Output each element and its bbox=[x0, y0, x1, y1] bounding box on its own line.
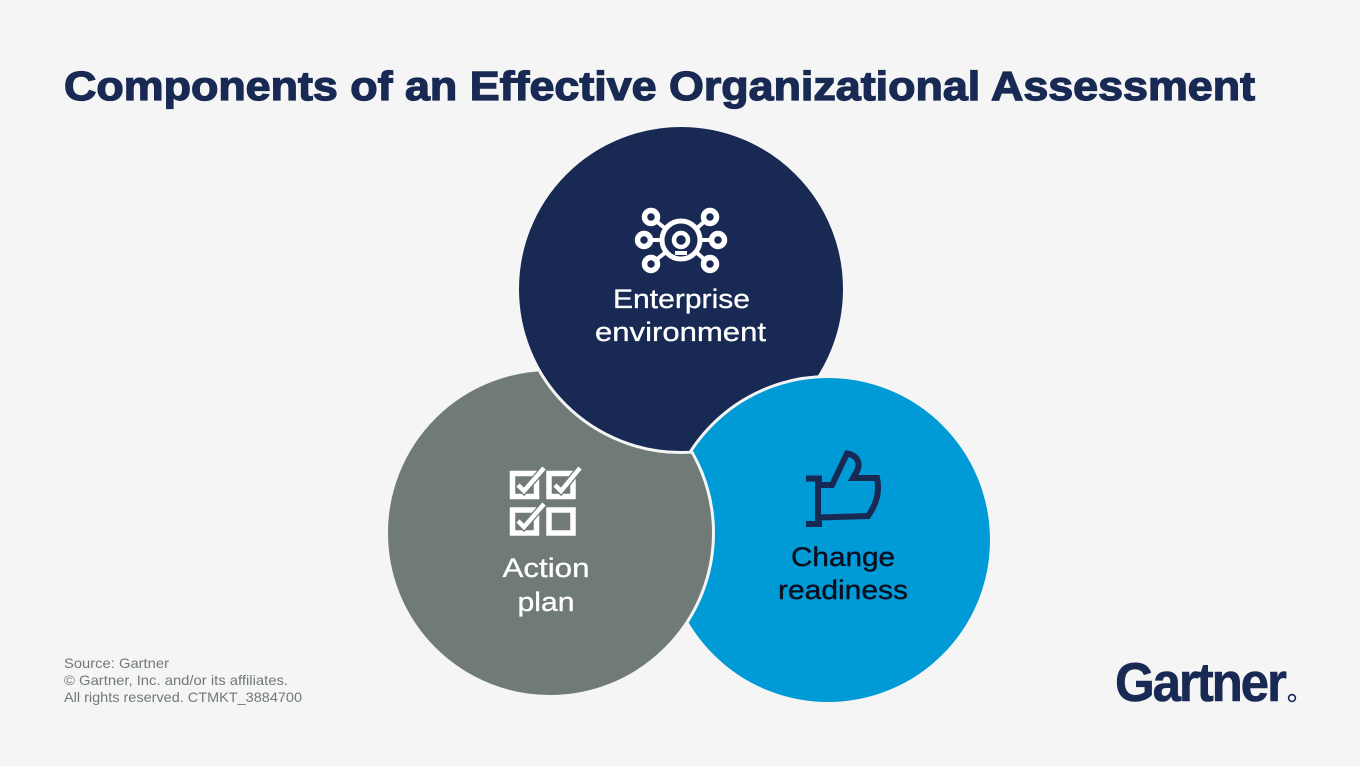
source note: Source: Gartner bbox=[64, 655, 169, 671]
panel: change readiness circle bbox=[666, 378, 990, 702]
source note: All rights reserved. CTMKT_3884700 bbox=[64, 689, 302, 705]
panel: change readiness overlap on enterprise circle bbox=[689, 375, 974, 470]
panel: enterprise environment circle bbox=[518, 126, 844, 452]
enterprise environment label bbox=[595, 284, 767, 347]
change readiness label: readiness bbox=[778, 575, 908, 605]
action plan label: plan bbox=[518, 587, 574, 617]
change readiness label bbox=[778, 542, 908, 605]
gartner logo: Gartner bbox=[1115, 652, 1286, 713]
action plan label: Action bbox=[502, 553, 590, 583]
enterprise environment label: Enterprise bbox=[613, 284, 750, 314]
icon: thumbs up bbox=[806, 454, 878, 524]
source note: © Gartner, Inc. and/or its affiliates. bbox=[64, 672, 288, 688]
icon: checklist bbox=[512, 468, 580, 533]
action plan label bbox=[502, 553, 590, 617]
panel: action plan circle bbox=[386, 370, 714, 696]
enterprise environment label: environment bbox=[595, 317, 767, 347]
icon: network with person bbox=[638, 210, 724, 270]
title: Components of an Effective Organizational Assessment bbox=[64, 63, 1255, 109]
change readiness label: Change bbox=[791, 542, 895, 572]
source note bbox=[64, 655, 302, 705]
